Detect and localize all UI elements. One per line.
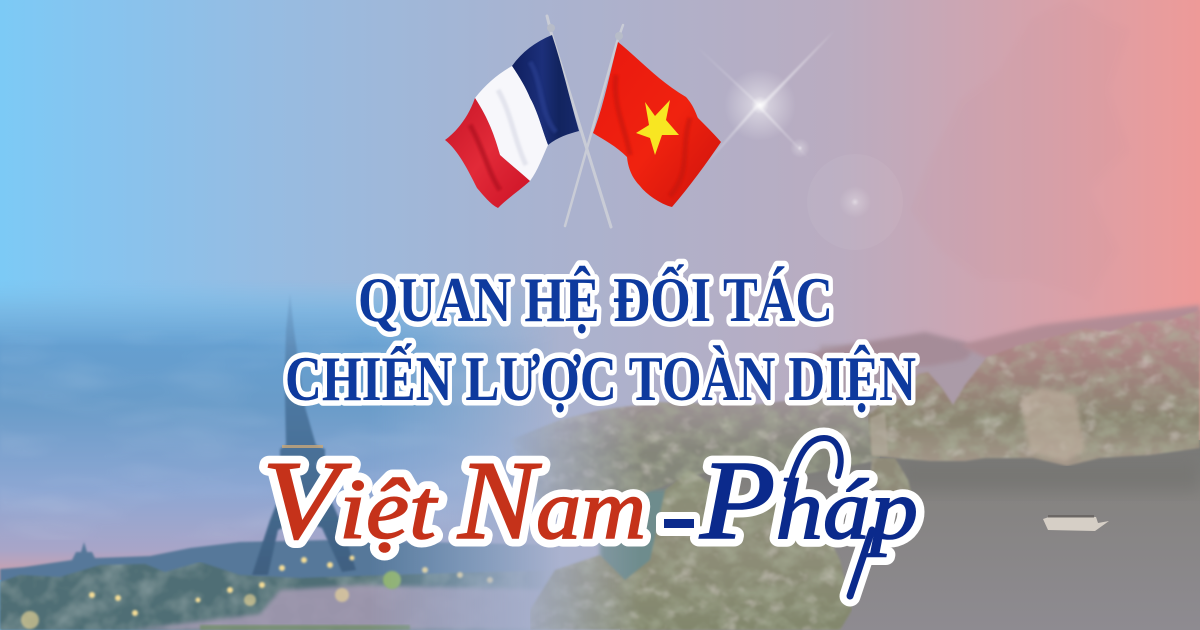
city lights	[21, 556, 493, 629]
script title: Việt: Việt	[262, 439, 438, 563]
panel: Paris scene	[0, 280, 560, 630]
lens flare	[695, 30, 903, 250]
foreground karst island	[530, 470, 852, 630]
haze behind islands	[820, 344, 986, 406]
flags	[445, 16, 721, 227]
title: second line: CHIẾN LƯỢC TOÀN DIỆN	[285, 343, 916, 414]
Vietnamese flag fold shading	[615, 75, 690, 196]
cruise boat	[1043, 515, 1109, 531]
icon: Vietnamese flag pole	[565, 25, 623, 226]
green lit tree	[383, 571, 401, 589]
cliff reflection on water	[912, 474, 1190, 485]
script title: Nam: Nam	[457, 439, 646, 563]
Eiffel Tower	[252, 293, 356, 575]
trees and city foreground	[0, 562, 503, 630]
script title white outline	[262, 438, 918, 596]
pale rock faces	[1020, 388, 1085, 462]
small rock pillar	[870, 458, 911, 491]
icon: French flag pole	[547, 16, 611, 227]
central karst ridge	[516, 398, 880, 501]
icon: Vietnamese flag	[593, 42, 721, 207]
script title white outline: Nam	[457, 439, 646, 563]
Paris sky	[0, 280, 560, 580]
faint map of Asia	[910, 0, 1130, 300]
main karst cliffs	[868, 310, 1200, 466]
script title: h loop	[787, 438, 841, 495]
icon: French flag	[445, 35, 579, 208]
icon: yellow star	[636, 100, 679, 155]
distant city skyline	[0, 540, 560, 630]
icon: pole finials	[547, 24, 623, 40]
teal water inlet	[598, 490, 664, 580]
script title: Pháp: Pháp	[699, 439, 918, 563]
script title: p descender	[850, 530, 872, 596]
script title white outline: Pháp	[699, 439, 918, 563]
far haze islands	[800, 332, 972, 368]
script title: dash	[664, 519, 694, 528]
French flag fold highlights	[530, 62, 556, 132]
bay water	[620, 440, 1200, 630]
panel: Ha Long Bay scene	[510, 305, 1200, 630]
promenade	[130, 585, 560, 630]
title: first line: QUAN HỆ ĐỐI TÁC	[358, 264, 833, 335]
script title white outline: Việt	[262, 439, 438, 563]
lawn	[200, 625, 410, 630]
Paris clouds	[4, 346, 386, 509]
